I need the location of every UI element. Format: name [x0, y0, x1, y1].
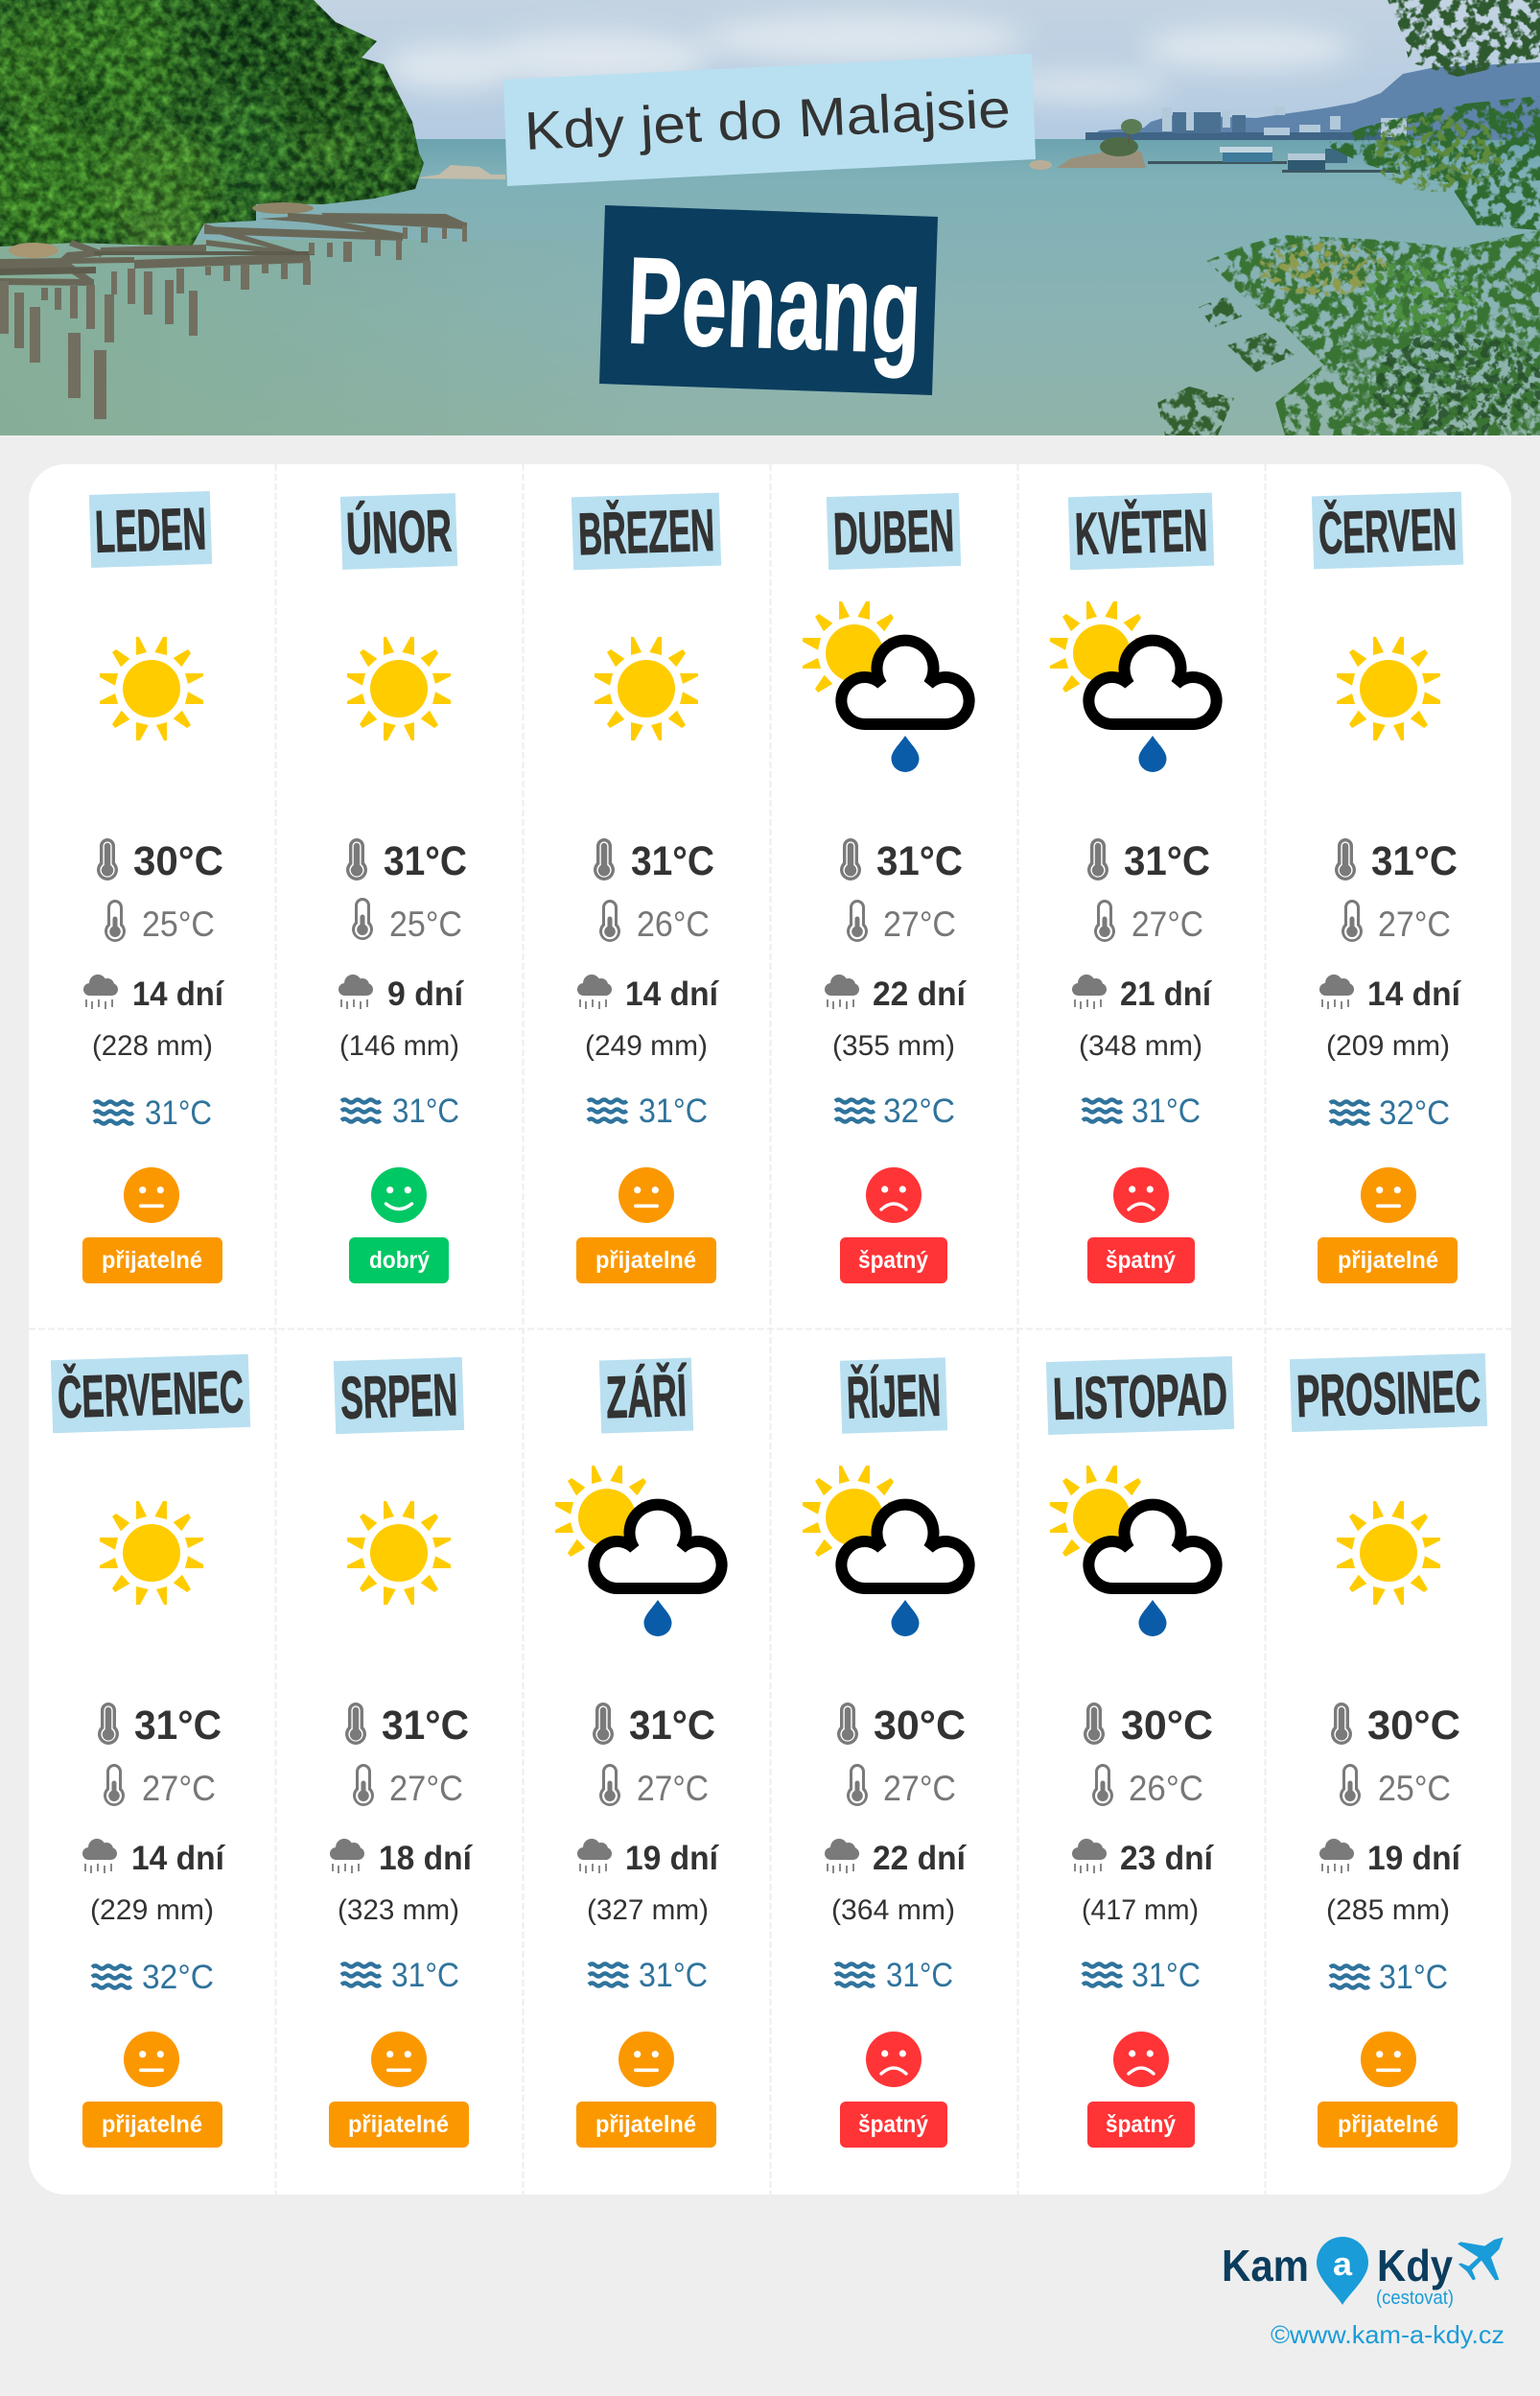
month label: DUBEN — [832, 498, 955, 568]
panel: Září — [555, 1358, 722, 2148]
rainy days: 14 dní — [132, 975, 224, 1013]
icon: min thermometer — [1340, 1764, 1361, 1806]
header photo: Penang coast — [0, 0, 1540, 436]
rating badge — [1318, 2102, 1458, 2148]
month label: SRPEN — [339, 1362, 458, 1432]
rainfall: (364 mm) — [831, 1894, 955, 1926]
rating badge — [840, 2102, 947, 2148]
icon: sun, cloud and rain drop — [803, 1466, 969, 1636]
icon: max thermometer — [97, 838, 118, 881]
rainy days: 22 dní — [873, 975, 967, 1013]
icon: min thermometer — [599, 1764, 620, 1806]
rating badge — [1318, 1237, 1458, 1283]
rainy days: 14 dní — [1367, 975, 1461, 1013]
icon: neutral face — [618, 1167, 674, 1223]
rating badge — [1087, 2102, 1195, 2148]
min temperature: 25°C — [389, 904, 462, 944]
month label — [827, 493, 961, 570]
icon: neutral face — [371, 2032, 427, 2087]
min temperature: 27°C — [1378, 904, 1451, 944]
month label — [572, 493, 721, 570]
rainy days: 14 dní — [625, 975, 719, 1013]
right foliage — [1157, 0, 1540, 435]
icon: max thermometer — [594, 838, 615, 881]
logo: Kam a Kdy: Kam — [1222, 2241, 1309, 2290]
icon: max thermometer — [837, 1703, 858, 1745]
rainfall: (417 mm) — [1082, 1894, 1199, 1926]
rainfall: (327 mm) — [587, 1894, 709, 1926]
icon: waves — [588, 1099, 627, 1122]
icon: sun, cloud and rain drop — [555, 1466, 722, 1636]
rating badge — [82, 2102, 222, 2148]
min temperature: 26°C — [637, 904, 710, 944]
rating badge: přijatelné — [1338, 1247, 1438, 1274]
icon: sun — [595, 637, 698, 740]
min temperature: 27°C — [142, 1769, 216, 1808]
rainy days: 22 dní — [873, 1840, 967, 1877]
month label: ČERVENEC — [57, 1359, 245, 1431]
icon: min thermometer — [599, 900, 620, 942]
panel: Říjen — [803, 1357, 969, 2148]
icon: happy face — [371, 1167, 427, 1223]
max temperature: 31°C — [384, 838, 467, 884]
max temperature: 30°C — [133, 838, 223, 884]
rating badge: přijatelné — [102, 1247, 202, 1274]
max temperature: 30°C — [1367, 1703, 1460, 1749]
icon: max thermometer — [1335, 838, 1356, 881]
icon: rain cloud — [825, 1839, 859, 1873]
logo: Kam a Kdy: (cestovat) — [1376, 2288, 1454, 2309]
rating badge — [1087, 1237, 1195, 1283]
icon: waves — [341, 1099, 381, 1122]
min temperature: 27°C — [1132, 904, 1203, 944]
icon: max thermometer — [1331, 1703, 1352, 1745]
rating badge: špatný — [1106, 1247, 1176, 1274]
sea temperature: 31°C — [392, 1092, 459, 1130]
rating badge — [576, 1237, 716, 1283]
icon: max thermometer — [840, 838, 861, 881]
icon: sun, cloud and rain drop — [1050, 1466, 1217, 1636]
icon: sun — [347, 637, 451, 740]
icon: rain cloud — [577, 1839, 612, 1873]
icon: sun — [100, 1501, 203, 1605]
icon: rain cloud — [83, 975, 118, 1009]
sea temperature: 31°C — [639, 1957, 708, 1994]
rainy days: 9 dní — [387, 975, 464, 1013]
icon: min thermometer — [1092, 1764, 1113, 1806]
max temperature: 31°C — [134, 1703, 222, 1749]
icon: rain cloud — [825, 975, 859, 1009]
month label — [89, 491, 212, 568]
rating badge: přijatelné — [348, 2111, 449, 2138]
month label: LEDEN — [94, 496, 207, 566]
icon: sun — [1337, 1501, 1440, 1605]
rainfall: (285 mm) — [1326, 1894, 1450, 1926]
subtitle label: Kdy jet do Malajsie — [524, 78, 1012, 161]
sea temperature: 31°C — [639, 1092, 708, 1130]
icon: max thermometer — [346, 838, 367, 881]
icon: rain cloud — [82, 1839, 117, 1873]
rating badge: dobrý — [369, 1247, 430, 1274]
rating badge — [82, 1237, 222, 1283]
icon: neutral face — [124, 2032, 179, 2087]
icon: sad face — [1113, 1167, 1169, 1223]
icon: min thermometer — [105, 900, 126, 942]
min temperature: 27°C — [883, 1769, 956, 1808]
icon: rain cloud — [338, 975, 373, 1009]
month label — [1046, 1356, 1234, 1435]
rainy days: 19 dní — [625, 1840, 719, 1877]
rating badge: špatný — [858, 1247, 928, 1274]
rainfall: (355 mm) — [832, 1030, 955, 1062]
rainfall: (249 mm) — [585, 1030, 708, 1062]
month label — [840, 1357, 947, 1434]
rainy days: 14 dní — [131, 1840, 225, 1877]
icon: sad face — [866, 2032, 922, 2087]
icon: min thermometer — [847, 900, 868, 942]
month label — [1068, 493, 1214, 570]
rating badge — [840, 1237, 947, 1283]
icon: waves — [341, 1964, 381, 1985]
month label: ZÁŘÍ — [605, 1363, 688, 1431]
icon: max thermometer — [593, 1703, 614, 1745]
min temperature: 25°C — [1378, 1769, 1451, 1808]
rainy days: 18 dní — [379, 1840, 473, 1877]
rating badge: špatný — [1106, 2111, 1176, 2138]
panel: Červenec — [51, 1354, 250, 2148]
icon: waves — [92, 1966, 131, 1987]
icon: waves — [1330, 1101, 1369, 1124]
icon: rain cloud — [330, 1839, 364, 1873]
min temperature: 27°C — [883, 904, 956, 944]
icon: sun, cloud and rain drop — [1050, 601, 1217, 772]
rating badge: přijatelné — [595, 1247, 696, 1274]
month label: ŘÍJEN — [846, 1362, 942, 1432]
rating badge: přijatelné — [102, 2111, 202, 2138]
title label: Penang — [599, 205, 938, 395]
month label — [340, 493, 457, 570]
icon: max thermometer — [1087, 838, 1108, 881]
rainfall: (229 mm) — [90, 1894, 214, 1926]
rainy days: 23 dní — [1120, 1840, 1214, 1877]
month label — [599, 1358, 693, 1433]
sea temperature: 31°C — [391, 1957, 459, 1994]
rainfall: (228 mm) — [92, 1030, 213, 1062]
icon: min thermometer — [104, 1764, 125, 1806]
icon: min thermometer — [847, 1764, 868, 1806]
icon: min thermometer — [353, 1764, 374, 1806]
icon: neutral face — [1361, 1167, 1416, 1223]
sea temperature: 31°C — [1132, 1092, 1201, 1130]
max temperature: 31°C — [876, 838, 963, 884]
icon: min thermometer — [1094, 900, 1115, 942]
icon: sun — [347, 1501, 451, 1605]
max temperature: 31°C — [1124, 838, 1210, 884]
month label — [1312, 492, 1463, 569]
icon: max thermometer — [345, 1703, 366, 1745]
rating badge — [329, 2102, 469, 2148]
icon: sad face — [866, 1167, 922, 1223]
sea temperature: 31°C — [145, 1094, 212, 1132]
sea temperature: 31°C — [886, 1957, 953, 1994]
icon: rain cloud — [1319, 1839, 1354, 1873]
rainfall: (323 mm) — [338, 1894, 459, 1926]
max temperature: 30°C — [1121, 1703, 1213, 1749]
rating badge: přijatelné — [1338, 2111, 1438, 2138]
icon: min thermometer — [352, 898, 373, 940]
rating badge: špatný — [858, 2111, 928, 2138]
panel: Květen — [1050, 493, 1217, 1283]
icon: waves — [835, 1964, 875, 1985]
icon: waves — [1083, 1099, 1122, 1122]
month label: LISTOPAD — [1052, 1361, 1228, 1433]
sea temperature: 31°C — [1132, 1957, 1201, 1994]
rainfall: (209 mm) — [1326, 1030, 1450, 1062]
month label — [51, 1354, 250, 1433]
rating badge — [576, 2102, 716, 2148]
panel: Březen — [572, 493, 721, 1283]
rainy days: 19 dní — [1367, 1840, 1461, 1877]
icon: max thermometer — [98, 1703, 119, 1745]
icon: waves — [589, 1964, 628, 1985]
panel: calendar card — [29, 464, 1511, 2195]
panel: Únor — [338, 493, 467, 1283]
rainfall: (348 mm) — [1079, 1030, 1202, 1062]
month label: BŘEZEN — [577, 498, 715, 568]
min temperature: 26°C — [1129, 1769, 1203, 1808]
rocks and huts — [1057, 149, 1146, 168]
sea temperature: 32°C — [883, 1092, 955, 1130]
sea temperature: 32°C — [142, 1959, 214, 1996]
icon: waves — [94, 1101, 133, 1124]
icon: sun, cloud and rain drop — [803, 601, 969, 772]
logo: Kam a Kdy: a — [1333, 2246, 1353, 2283]
icon: airplane — [1458, 2238, 1504, 2280]
sea temperature: 32°C — [1379, 1094, 1450, 1132]
left trees — [0, 0, 441, 251]
icon: rain cloud — [1072, 975, 1107, 1009]
icon: rain cloud — [1319, 975, 1354, 1009]
panel: Duben — [803, 493, 969, 1283]
icon: waves — [835, 1099, 875, 1122]
max temperature: 31°C — [629, 1703, 715, 1749]
rainfall: (146 mm) — [339, 1030, 459, 1062]
icon: waves — [1083, 1964, 1122, 1985]
wooden pier — [0, 213, 467, 286]
min temperature: 27°C — [389, 1769, 463, 1808]
icon: map pin — [1317, 2237, 1368, 2305]
logo: Kam a Kdy — [1222, 2237, 1504, 2309]
panel: Červen — [1312, 492, 1463, 1283]
icon: rain cloud — [577, 975, 612, 1009]
mountain and skyline — [1085, 62, 1540, 140]
website credit: ©www.kam-a-kdy.cz — [1271, 2320, 1505, 2349]
month label: KVĚTEN — [1074, 498, 1208, 568]
rating badge — [349, 1237, 449, 1283]
icon: neutral face — [1361, 2032, 1416, 2087]
icon: max thermometer — [1084, 1703, 1105, 1745]
icon: sun — [1337, 637, 1440, 740]
subtitle label — [503, 54, 1036, 186]
panel: Srpen — [329, 1357, 473, 2148]
icon: waves — [1330, 1966, 1369, 1987]
title label: Penang: Penang — [625, 232, 923, 380]
panel: Leden — [82, 491, 224, 1283]
min temperature: 25°C — [142, 904, 215, 944]
rating badge: přijatelné — [595, 2111, 696, 2138]
icon: neutral face — [124, 1167, 179, 1223]
icon: min thermometer — [1342, 900, 1363, 942]
max temperature: 31°C — [382, 1703, 469, 1749]
max temperature: 31°C — [1371, 838, 1458, 884]
logo: Kam a Kdy: Kdy — [1377, 2241, 1453, 2290]
rainy days: 21 dní — [1120, 975, 1212, 1013]
min temperature: 27°C — [637, 1769, 709, 1808]
max temperature: 30°C — [874, 1703, 966, 1749]
panel: Listopad — [1046, 1356, 1234, 2148]
icon: neutral face — [618, 2032, 674, 2087]
sea temperature: 31°C — [1379, 1959, 1448, 1996]
month label — [334, 1357, 464, 1434]
panel: Prosinec — [1290, 1353, 1487, 2148]
max temperature: 31°C — [631, 838, 714, 884]
month label: ÚNOR — [345, 498, 453, 568]
icon: sad face — [1113, 2032, 1169, 2087]
icon: sun — [100, 637, 203, 740]
icon: rain cloud — [1072, 1839, 1107, 1873]
